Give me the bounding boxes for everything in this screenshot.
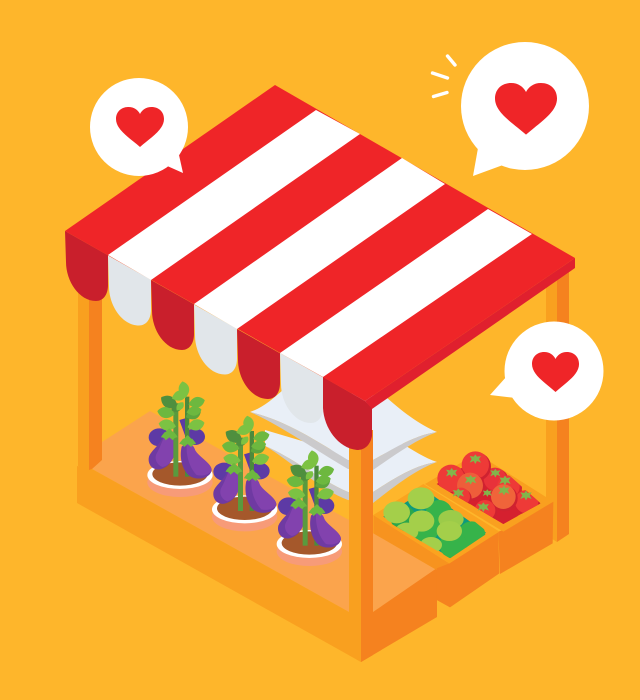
illustration: market stall <box>65 42 604 662</box>
right floor surface <box>373 533 437 612</box>
eggplant plants <box>147 380 342 566</box>
base front face <box>77 466 361 662</box>
upper sack <box>250 388 437 470</box>
plant 3 <box>277 449 342 566</box>
lower sack <box>265 430 437 503</box>
side strip <box>365 258 575 409</box>
roof base <box>65 85 575 401</box>
plant 1 <box>147 380 213 497</box>
sparkle lines <box>432 56 455 96</box>
icon: heart <box>495 83 557 135</box>
icon: heart <box>532 352 579 392</box>
speech bubble: left <box>90 78 188 176</box>
floor surface <box>92 411 349 612</box>
white stripes <box>108 110 360 280</box>
awning <box>65 85 575 450</box>
speech bubble: right <box>490 322 604 420</box>
plant 2 <box>212 415 277 531</box>
valance scallops <box>65 231 372 450</box>
base right face <box>361 568 437 662</box>
front post <box>349 430 373 662</box>
left post <box>78 280 102 470</box>
back right post <box>546 270 569 542</box>
crate of tomatoes <box>425 451 553 574</box>
crate of green fruit <box>373 484 499 607</box>
stall base and floor <box>77 411 437 662</box>
icon: heart <box>116 107 164 147</box>
speech bubble: top right <box>461 42 589 176</box>
sacks <box>250 388 437 503</box>
crates <box>373 451 553 607</box>
